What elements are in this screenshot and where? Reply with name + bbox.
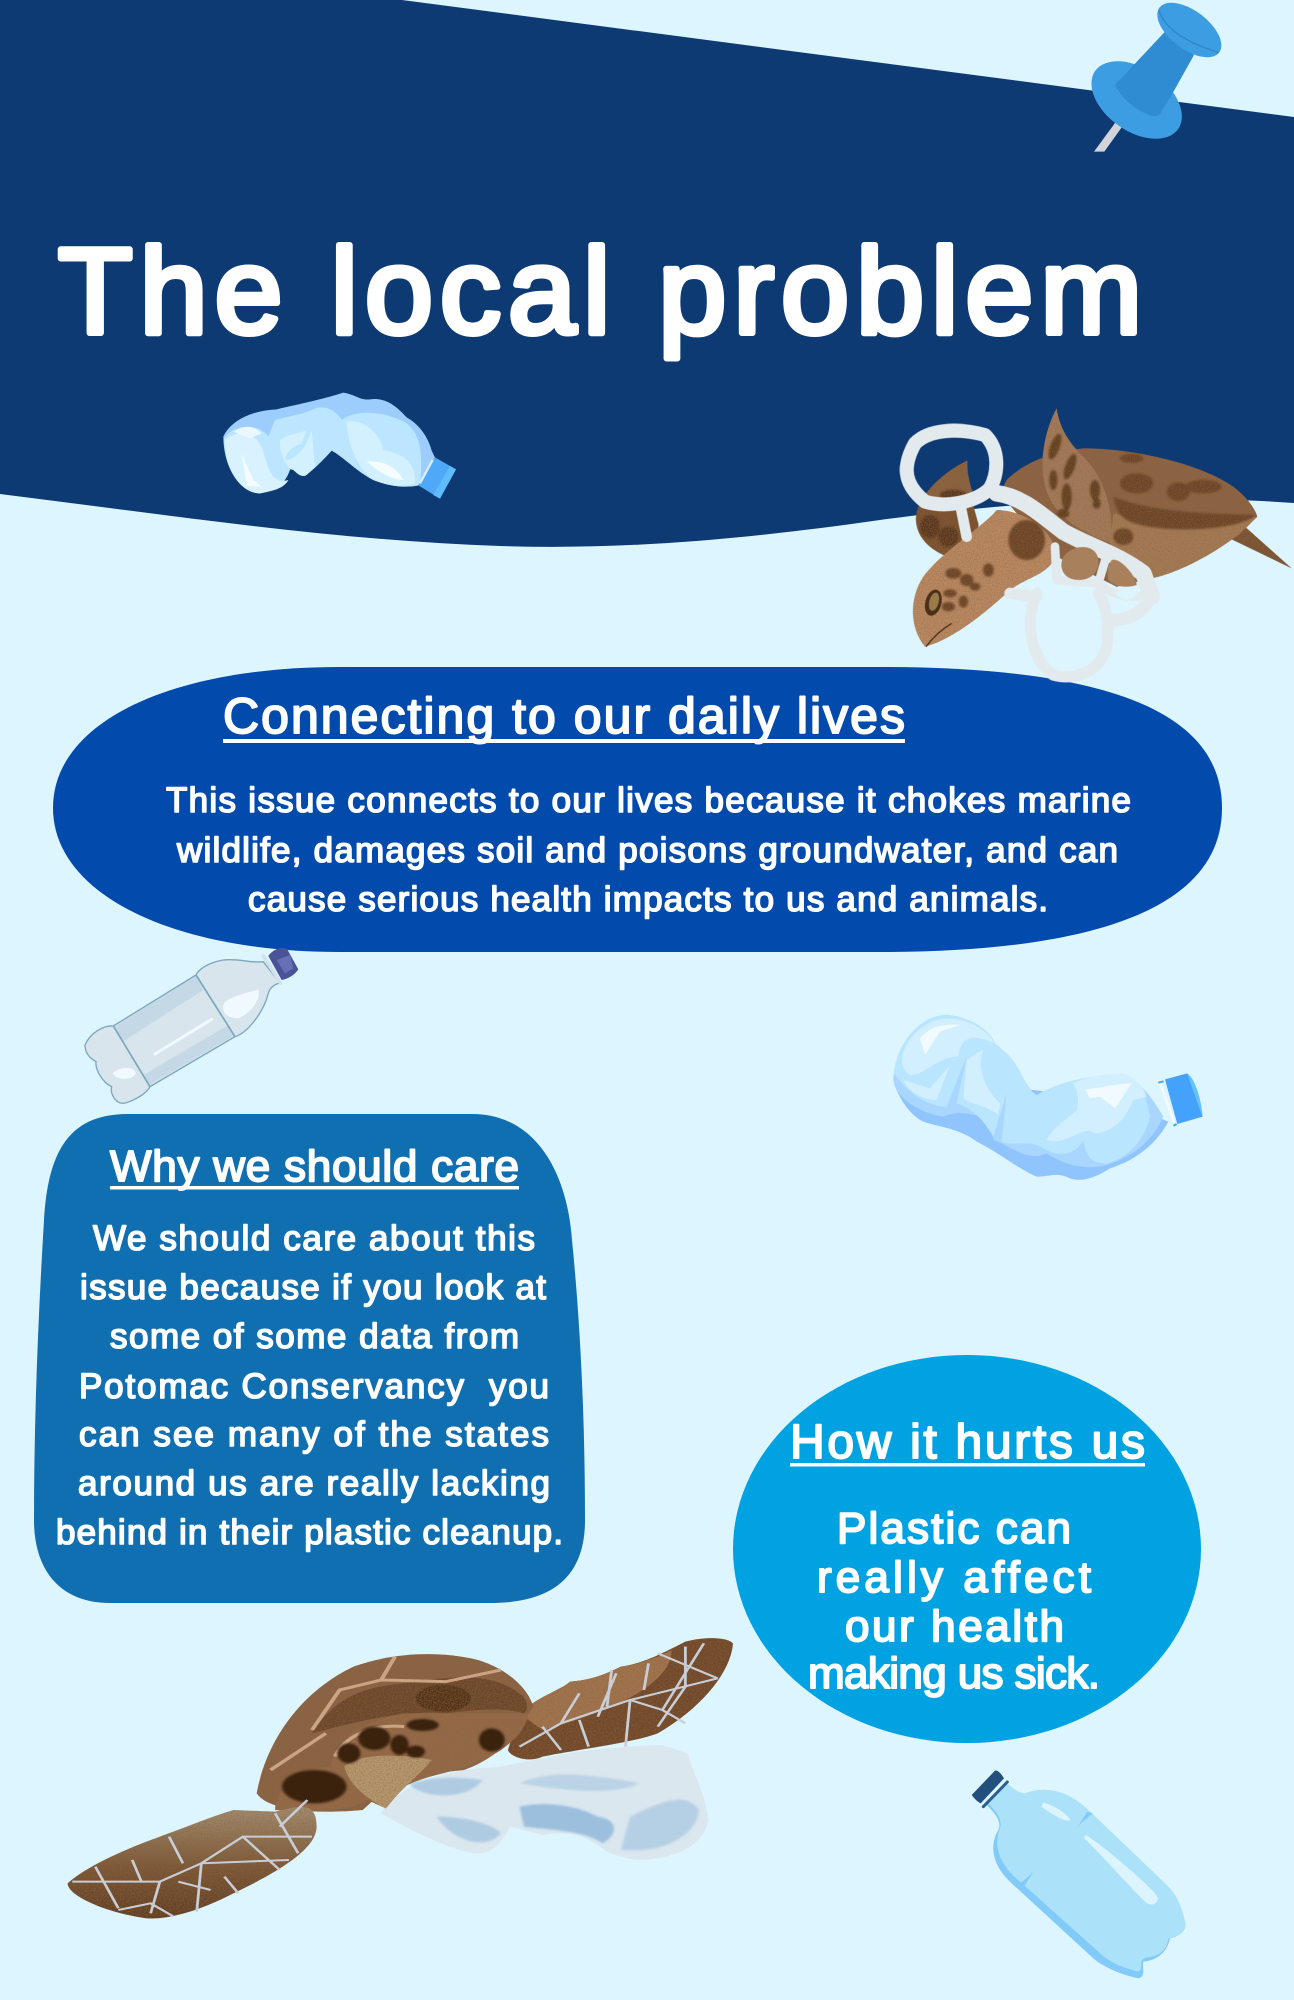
- panel: connecting to our daily lives: [53, 667, 1222, 952]
- body text: making us sick.: [808, 1649, 1100, 1698]
- body text: behind in their plastic cleanup.: [56, 1513, 563, 1552]
- body text: We should care about this: [93, 1219, 535, 1258]
- heading: Why we should care: [110, 1142, 519, 1191]
- body text: really affect: [817, 1553, 1091, 1602]
- far flipper: [508, 1638, 733, 1759]
- title: The local problem: [58, 223, 1142, 359]
- panel: how it hurts us: [733, 1355, 1201, 1743]
- icon: push pin: [1077, 0, 1231, 155]
- panel shape: [34, 1114, 585, 1603]
- icon: plastic water bottle: [85, 948, 298, 1103]
- illustration: sea turtle tangled in plastic rings: [907, 408, 1292, 677]
- panel: why we should care: [34, 1114, 585, 1603]
- body text: [56, 1219, 563, 1552]
- body text: our health: [845, 1602, 1064, 1651]
- head: [913, 510, 1057, 647]
- body text: around us are really lacking: [78, 1464, 550, 1503]
- panel shape: [53, 667, 1222, 952]
- front flipper: [1043, 408, 1112, 543]
- panel shape: [733, 1355, 1201, 1743]
- body text: Potomac Conservancy you: [79, 1367, 549, 1406]
- rear flipper: [916, 461, 978, 555]
- heading: Connecting to our daily lives: [223, 688, 905, 744]
- plastic six-pack rings: [907, 431, 1152, 677]
- body text: cause serious health impacts to us and animals.: [248, 880, 1048, 919]
- body text: some of some data from: [110, 1317, 519, 1356]
- shell and head: [257, 1654, 533, 1812]
- icon: crushed bottle on header: [223, 393, 456, 499]
- plastic bag: [381, 1745, 708, 1860]
- icon: crushed plastic bottle: [893, 1015, 1203, 1180]
- turtle body: [913, 408, 1292, 647]
- body text: [166, 781, 1131, 919]
- near flipper: [68, 1807, 317, 1918]
- heading: How it hurts us: [790, 1416, 1145, 1469]
- body text: Plastic can: [837, 1504, 1071, 1553]
- body text: This issue connects to our lives because it chokes marine: [166, 781, 1131, 820]
- illustration: sea turtle with plastic bag: [68, 1638, 733, 1918]
- shell: [1000, 448, 1257, 587]
- body text: wildlife, damages soil and poisons groundwater, and can: [176, 831, 1118, 870]
- header band: [0, 0, 1294, 547]
- body text: issue because if you look at: [80, 1268, 546, 1307]
- body text: [808, 1504, 1100, 1698]
- body text: can see many of the states: [79, 1415, 549, 1454]
- icon: large plastic jug: [972, 1770, 1185, 1978]
- tail: [1232, 527, 1292, 568]
